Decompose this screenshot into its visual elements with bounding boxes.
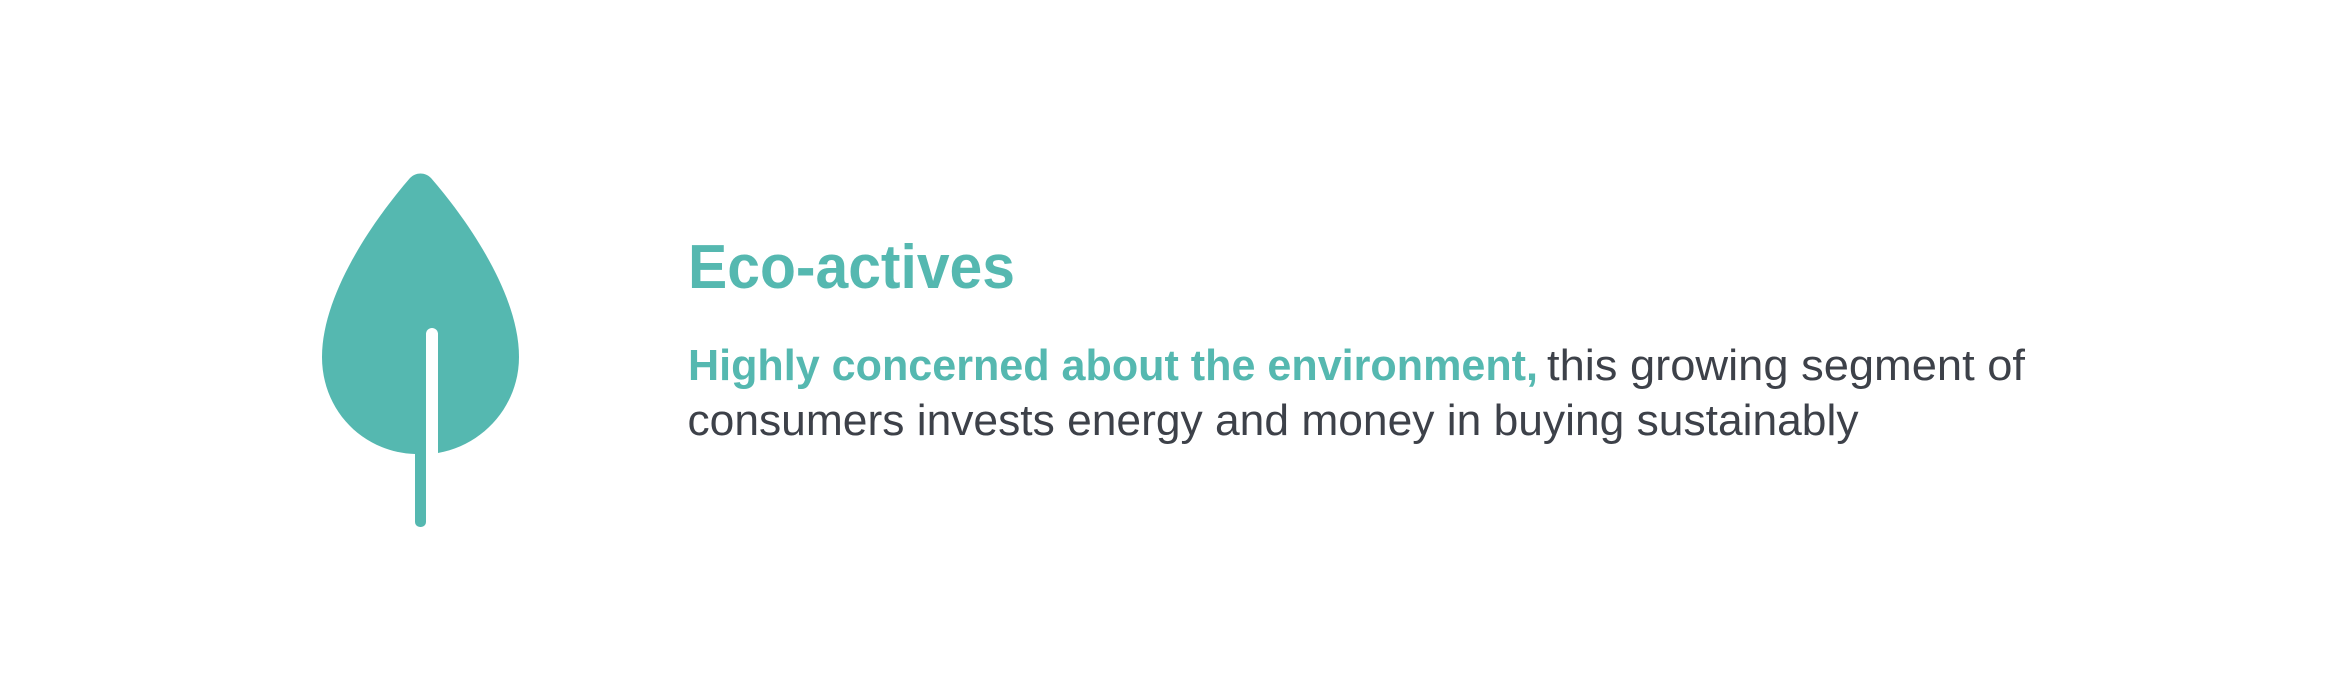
- text block: description: consumers invests energy and money in buying sustainably: [688, 396, 1858, 445]
- text block: description: Highly concerned about the environment,: [688, 341, 1538, 390]
- text block: description: this growing segment of: [1547, 341, 2026, 390]
- text block: description: [688, 341, 2026, 445]
- heading: Eco-actives: Eco-actives: [688, 233, 1015, 302]
- icon: leaf: [322, 174, 519, 527]
